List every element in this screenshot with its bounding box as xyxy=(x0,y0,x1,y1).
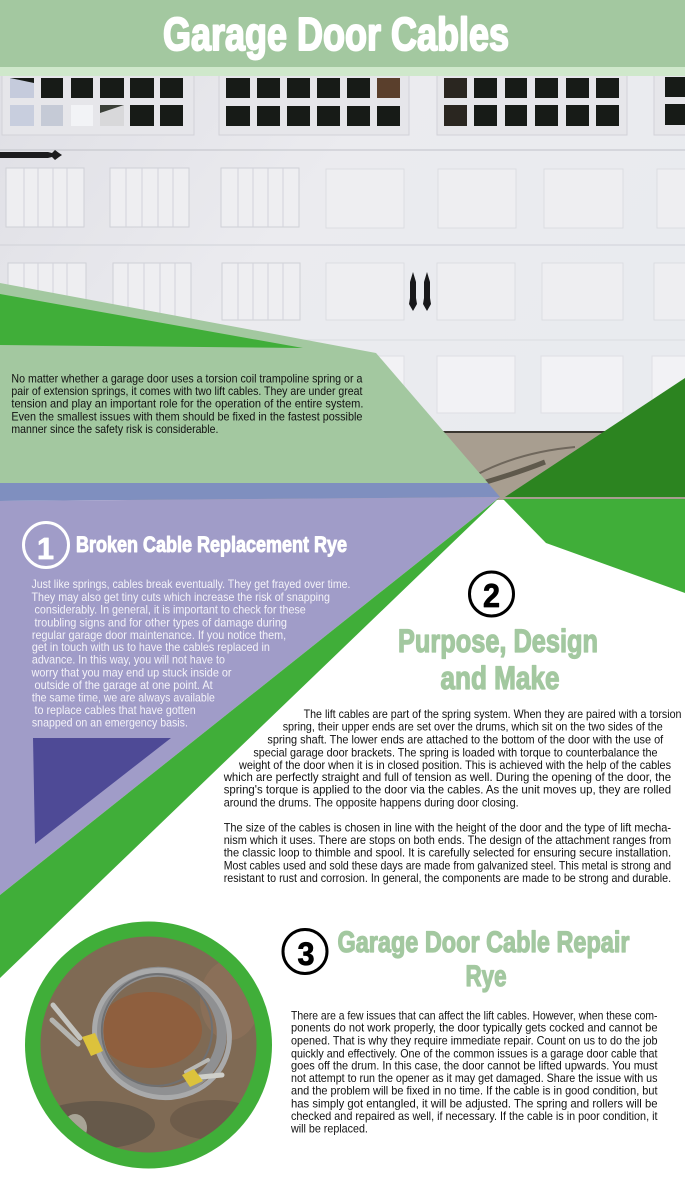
text block: section 1: troubling signs and for other types of damage during xyxy=(34,615,287,629)
heading: garage door cable repair rye: Rye xyxy=(466,960,506,993)
window panes xyxy=(10,77,685,126)
icon: number 2: 2 xyxy=(483,577,500,614)
text block: section 1: Just like springs, cables break eventually. They get frayed over time. xyxy=(32,577,350,591)
heading: garage door cable repair rye xyxy=(338,926,630,993)
text block: section 1: get in touch with us to have the cables replaced in xyxy=(32,640,270,654)
text block: intro: tension and play an important role for the operation of the entire system. xyxy=(11,396,363,410)
text block: section 3: ponents do not work properly, the door typically gets cocked and cannot be xyxy=(291,1021,658,1035)
icon: number 3 xyxy=(283,930,327,974)
text block: intro: manner since the safety risk is considerable. xyxy=(11,422,218,436)
text block: section 2 first paragraph: around the drums. The opposite happens during door closing. xyxy=(224,795,519,809)
text block: intro: No matter whether a garage door uses a torsion coil trampoline spring or a xyxy=(11,371,363,385)
heading: purpose, design and make: Purpose, Design xyxy=(398,623,598,659)
heading: purpose, design and make: and Make xyxy=(440,660,560,696)
icon: number 3: 3 xyxy=(298,936,314,972)
accent: green triangle top left xyxy=(0,294,303,348)
text block: section 1: They may also get tiny cuts which increase the risk of snapping xyxy=(32,590,330,604)
text block: section 3 xyxy=(290,1008,658,1136)
accent: green diagonal band xyxy=(0,497,500,978)
door grooves xyxy=(0,150,685,340)
icon: number 2 xyxy=(470,572,514,616)
heading: purpose, design and make xyxy=(398,623,598,696)
icon: door hinge xyxy=(0,150,62,160)
text block: section 1 xyxy=(31,577,351,730)
text block: intro xyxy=(11,371,363,436)
door panels xyxy=(6,168,685,416)
text block: section 3: will be replaced. xyxy=(290,1122,368,1136)
text block: section 2 first paragraph xyxy=(223,707,682,809)
text block: section 2 first paragraph: spring's torque is applied to the door via the cables. As the unit moves up, they are rolled xyxy=(224,783,671,797)
icon: number 1: 1 xyxy=(37,531,54,566)
accent: blue band xyxy=(0,483,500,501)
photo: cable coil in green circle xyxy=(25,922,272,1168)
text block: section 1: outside of the garage at one point. At xyxy=(34,678,213,692)
header band xyxy=(0,0,685,76)
text block: section 2 first paragraph: which are perfectly straight and full of tension as well. During the opening of the door, the xyxy=(223,770,671,784)
text block: intro: Even the smallest issues with them should be fixed in the fastest possible xyxy=(11,410,363,424)
text block: section 1: to replace cables that have gotten xyxy=(34,703,196,717)
heading: broken cable replacement: Broken Cable Replacement Rye xyxy=(76,532,347,557)
accent: bright green shape right xyxy=(503,499,685,593)
panel beadboard lines xyxy=(24,168,283,320)
garage door photo xyxy=(0,74,685,500)
panel: intro background xyxy=(0,283,488,483)
text block: section 1: the same time, we are always available xyxy=(32,691,215,705)
text block: section 2 second paragraph xyxy=(224,821,671,885)
window surrounds xyxy=(2,74,685,135)
text block: intro: pair of extension springs, it comes with two lift cables. They are under great xyxy=(11,384,363,398)
panel: section 1 background xyxy=(0,497,500,895)
text block: section 1: advance. In this way, you will not have to xyxy=(32,653,225,667)
text block: section 3: has simply got entangled, it will be adjusted. The spring and rollers will be xyxy=(291,1096,658,1110)
accent: dark green triangle right xyxy=(505,378,685,497)
icon: door handles xyxy=(409,272,431,311)
text block: section 1: snapped on an emergency basis. xyxy=(32,716,188,730)
text block: section 3: goes off the drum. In this case, the door cannot be lifted upwards. You must xyxy=(291,1059,658,1073)
title: Garage Door Cables xyxy=(163,8,509,60)
text block: section 3: and the problem will be fixed in no time. If the cable is in good condition, but xyxy=(291,1084,658,1098)
text block: section 1: worry that you may end up stuck inside or xyxy=(31,665,232,679)
icon: number 1 xyxy=(24,522,68,568)
text block: section 1: considerably. In general, it is important to check for these xyxy=(34,602,306,616)
text block: section 1: regular garage door maintenance. If you notice them, xyxy=(32,628,286,642)
accent: dark purple triangle xyxy=(33,738,171,844)
